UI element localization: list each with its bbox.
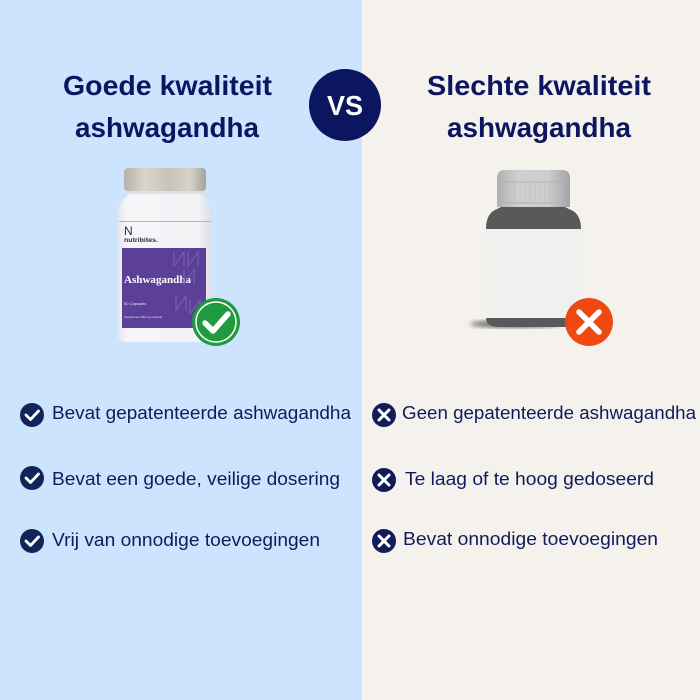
- icon: green check badge: [192, 298, 240, 346]
- item: wrong dose: Te laag of te hoog gedoseerd: [405, 469, 654, 489]
- VS badge: VS: [327, 90, 363, 121]
- icon: red cross badge: [565, 298, 613, 346]
- heading: good quality: ashwagandha: [75, 112, 259, 143]
- item: has additives: Bevat onnodige toevoegingen: [403, 529, 658, 549]
- item: dosage: Bevat een goede, veilige dosering: [52, 469, 340, 489]
- VS badge: [309, 69, 381, 141]
- product: Nutribites ashwagandha bottle: Ashwagandha: [124, 274, 192, 286]
- item: additives free: [20, 529, 320, 553]
- product: Nutribites ashwagandha bottle: Supplement 600 mg capsule: [124, 315, 162, 319]
- item: not patented: Geen gepatenteerde ashwagandha: [402, 403, 697, 423]
- item: additives free: Vrij van onnodige toevoegingen: [52, 530, 320, 550]
- product: Nutribites ashwagandha bottle: [118, 168, 212, 342]
- list: drawbacks of poor quality: [372, 403, 697, 553]
- product: Nutribites ashwagandha bottle: N: [124, 224, 133, 238]
- heading: good quality: [63, 70, 272, 143]
- heading: good quality: Goede kwaliteit: [63, 70, 272, 101]
- item: has additives: [372, 529, 658, 553]
- item: patented: Bevat gepatenteerde ashwagandha: [52, 403, 352, 423]
- item: wrong dose: [372, 468, 654, 492]
- panel: poor quality background: [362, 0, 700, 700]
- heading: poor quality: Slechte kwaliteit: [427, 70, 651, 101]
- heading: poor quality: [427, 70, 651, 143]
- panel: good quality background: [0, 0, 362, 700]
- product: Nutribites ashwagandha bottle: nutribites.: [124, 237, 158, 244]
- product: unbranded bottle: [470, 170, 581, 328]
- product: Nutribites ashwagandha bottle: 60 Capsules: [124, 301, 146, 306]
- heading: poor quality: ashwagandha: [447, 112, 631, 143]
- list: benefits of good quality: [20, 403, 352, 553]
